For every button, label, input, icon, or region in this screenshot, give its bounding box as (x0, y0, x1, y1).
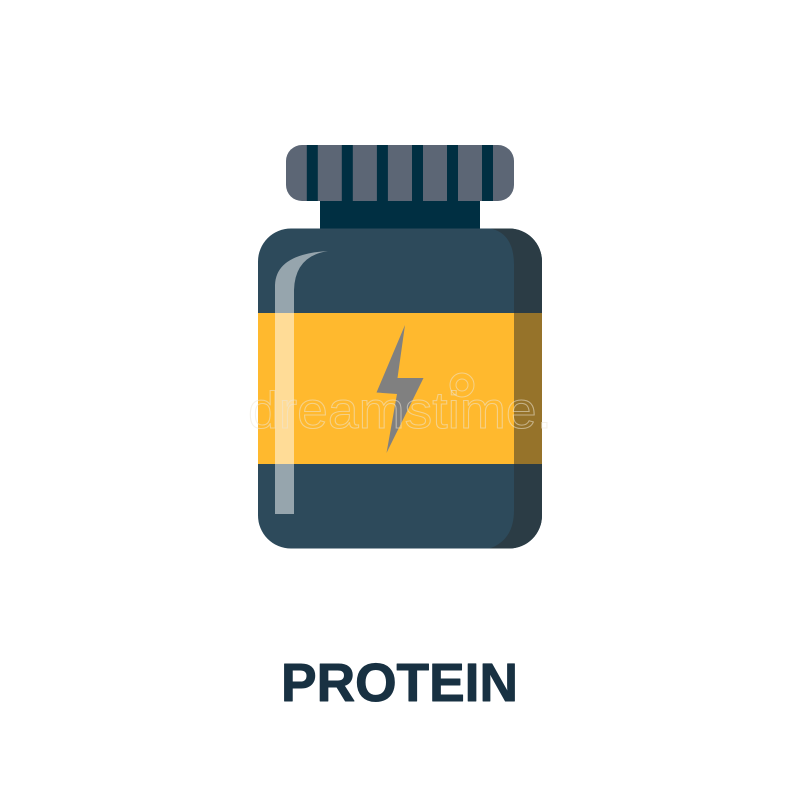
jar neck (320, 195, 480, 230)
jar body (258, 228, 542, 549)
jar lid with ridges (286, 145, 514, 201)
infographic canvas (250, 145, 548, 702)
yellow label (258, 313, 514, 464)
icon: protein jar (258, 145, 542, 549)
title: PROTEIN (281, 653, 518, 713)
label shaded side (514, 313, 542, 464)
icon: lightning bolt (376, 325, 424, 453)
right side shadow (488, 228, 542, 549)
watermark: dreamstime. (248, 382, 552, 440)
left glass highlight (275, 251, 328, 514)
